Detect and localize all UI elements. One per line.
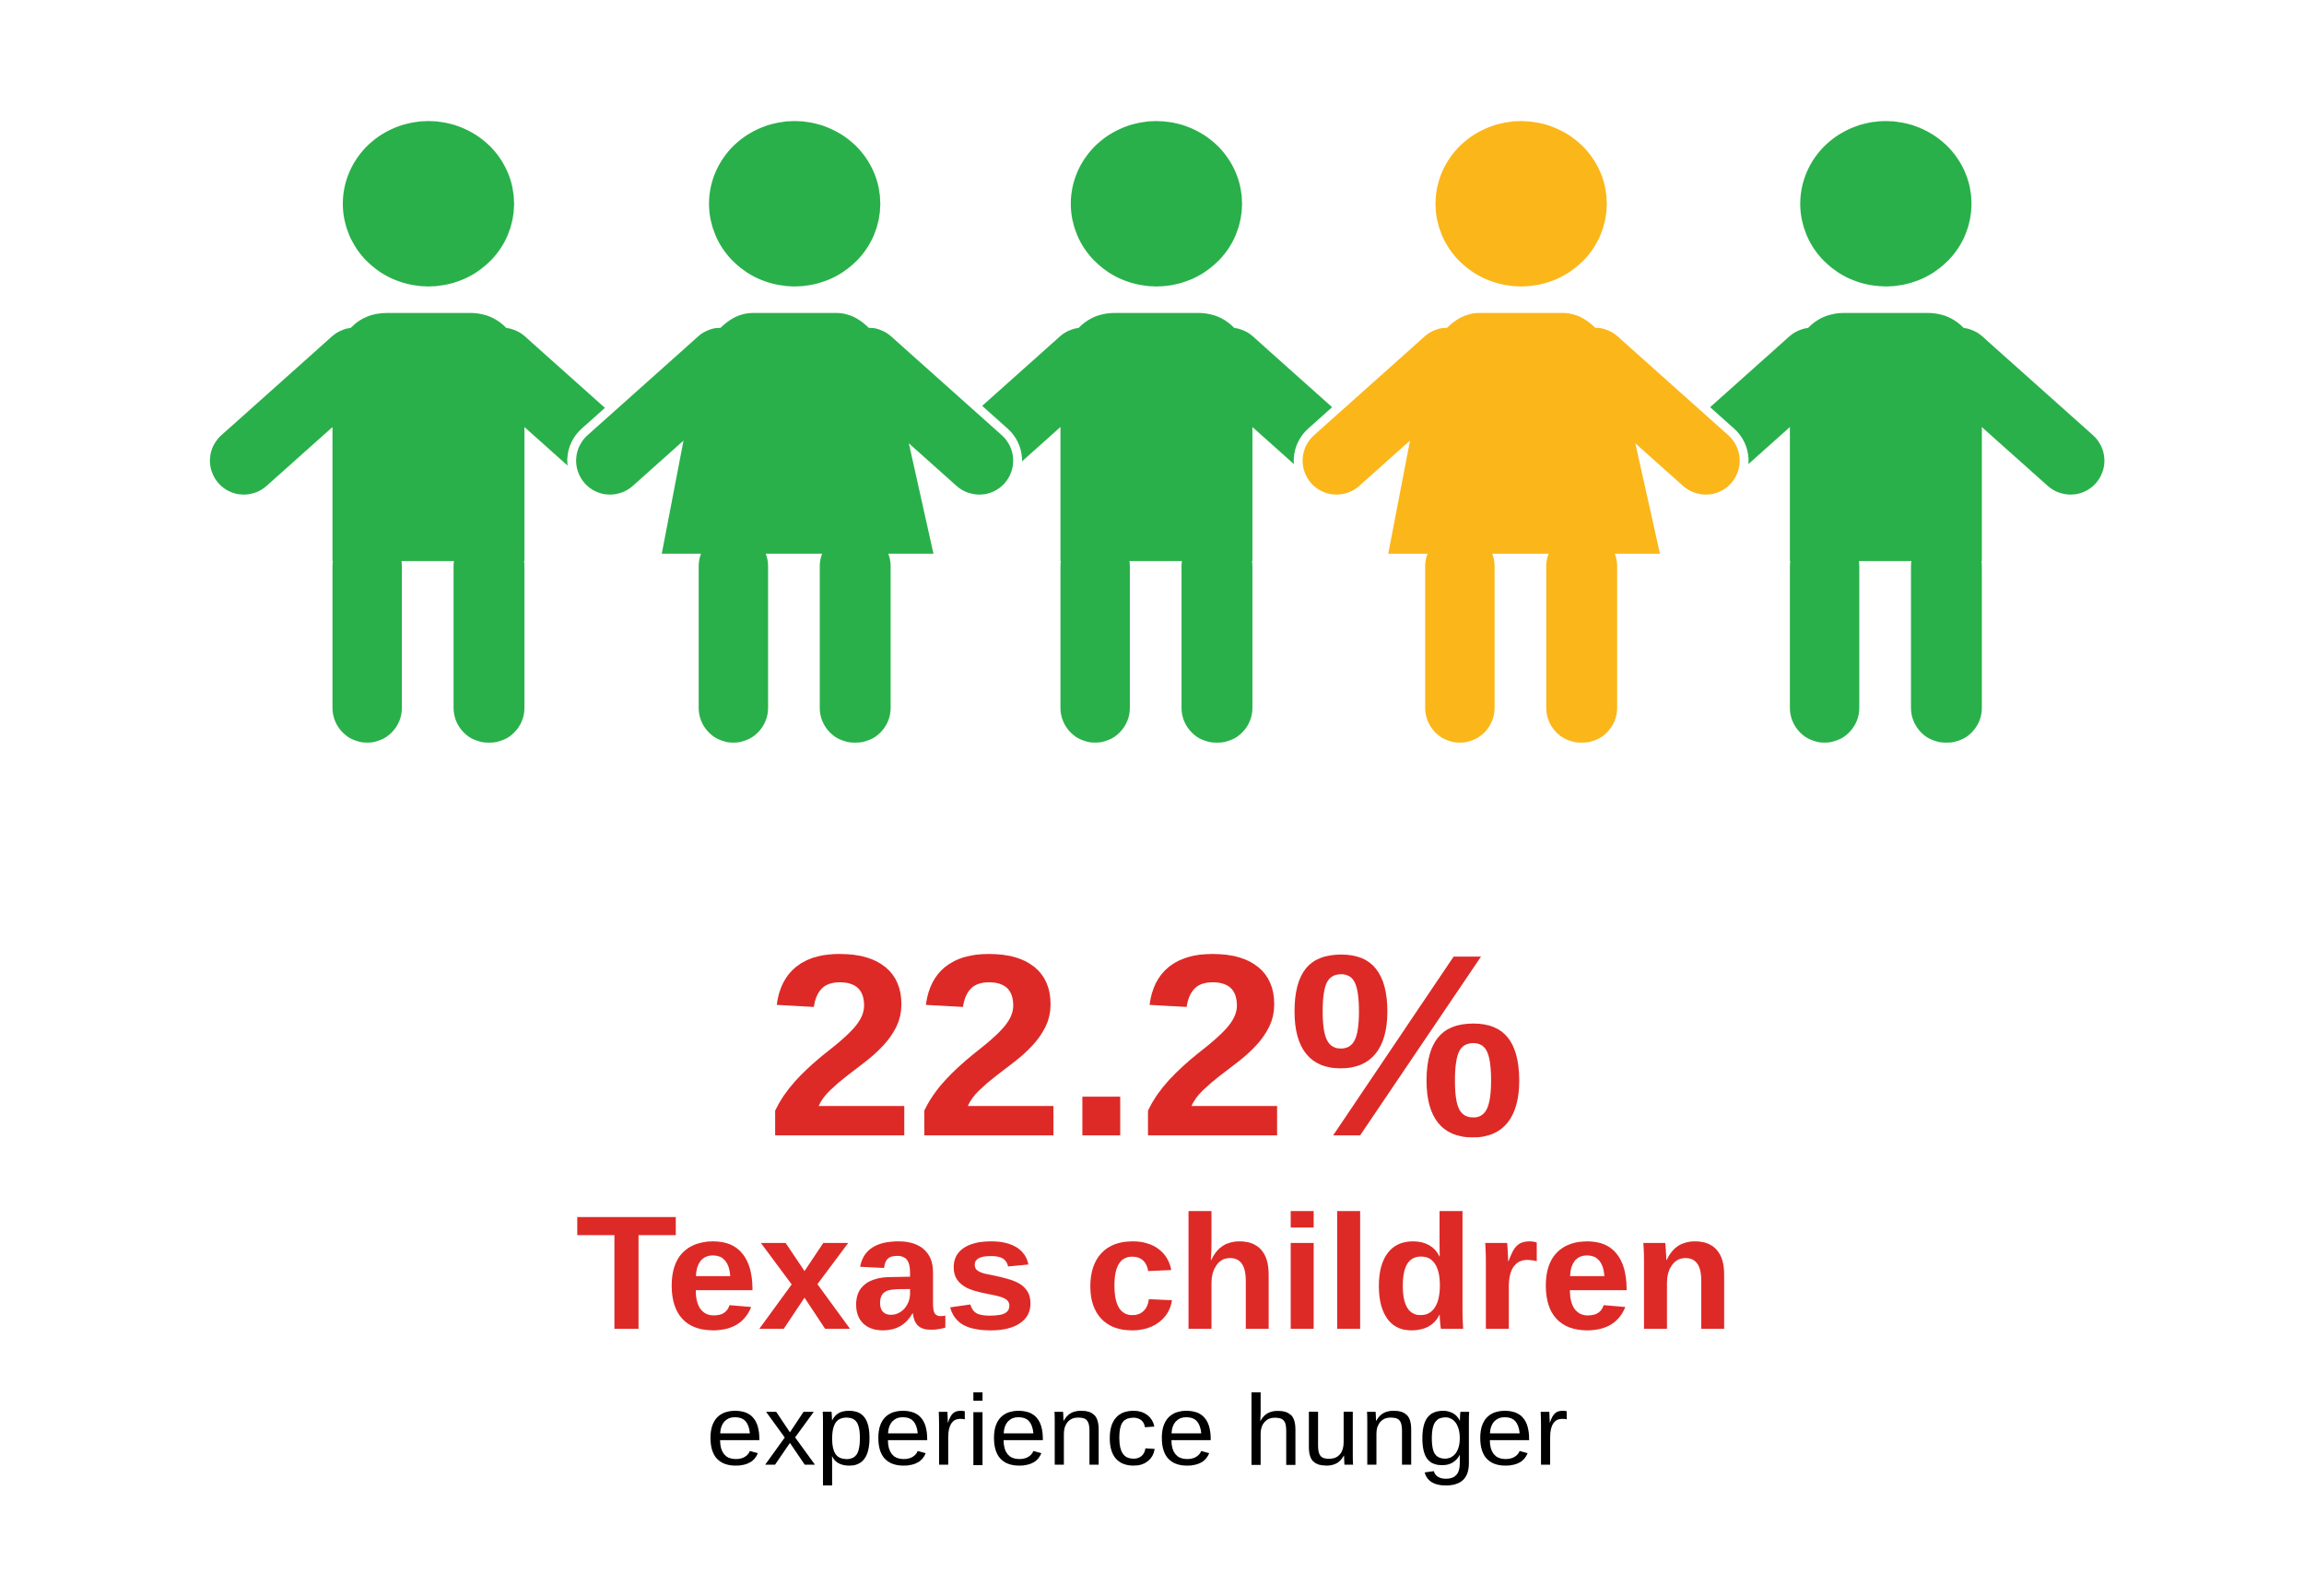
figure 1: green boy	[244, 121, 613, 743]
figure 3: green boy	[972, 121, 1341, 743]
statistic 22.2%: 22.2%	[766, 900, 1526, 1191]
figure 5: green boy	[1701, 121, 2071, 743]
figure 2: green girl	[610, 121, 980, 743]
heading: Texas children: Texas children	[575, 1182, 1734, 1364]
subtext: experience hunger: experience hunger	[706, 1374, 1569, 1486]
figure 4: yellow girl	[1336, 121, 1706, 743]
